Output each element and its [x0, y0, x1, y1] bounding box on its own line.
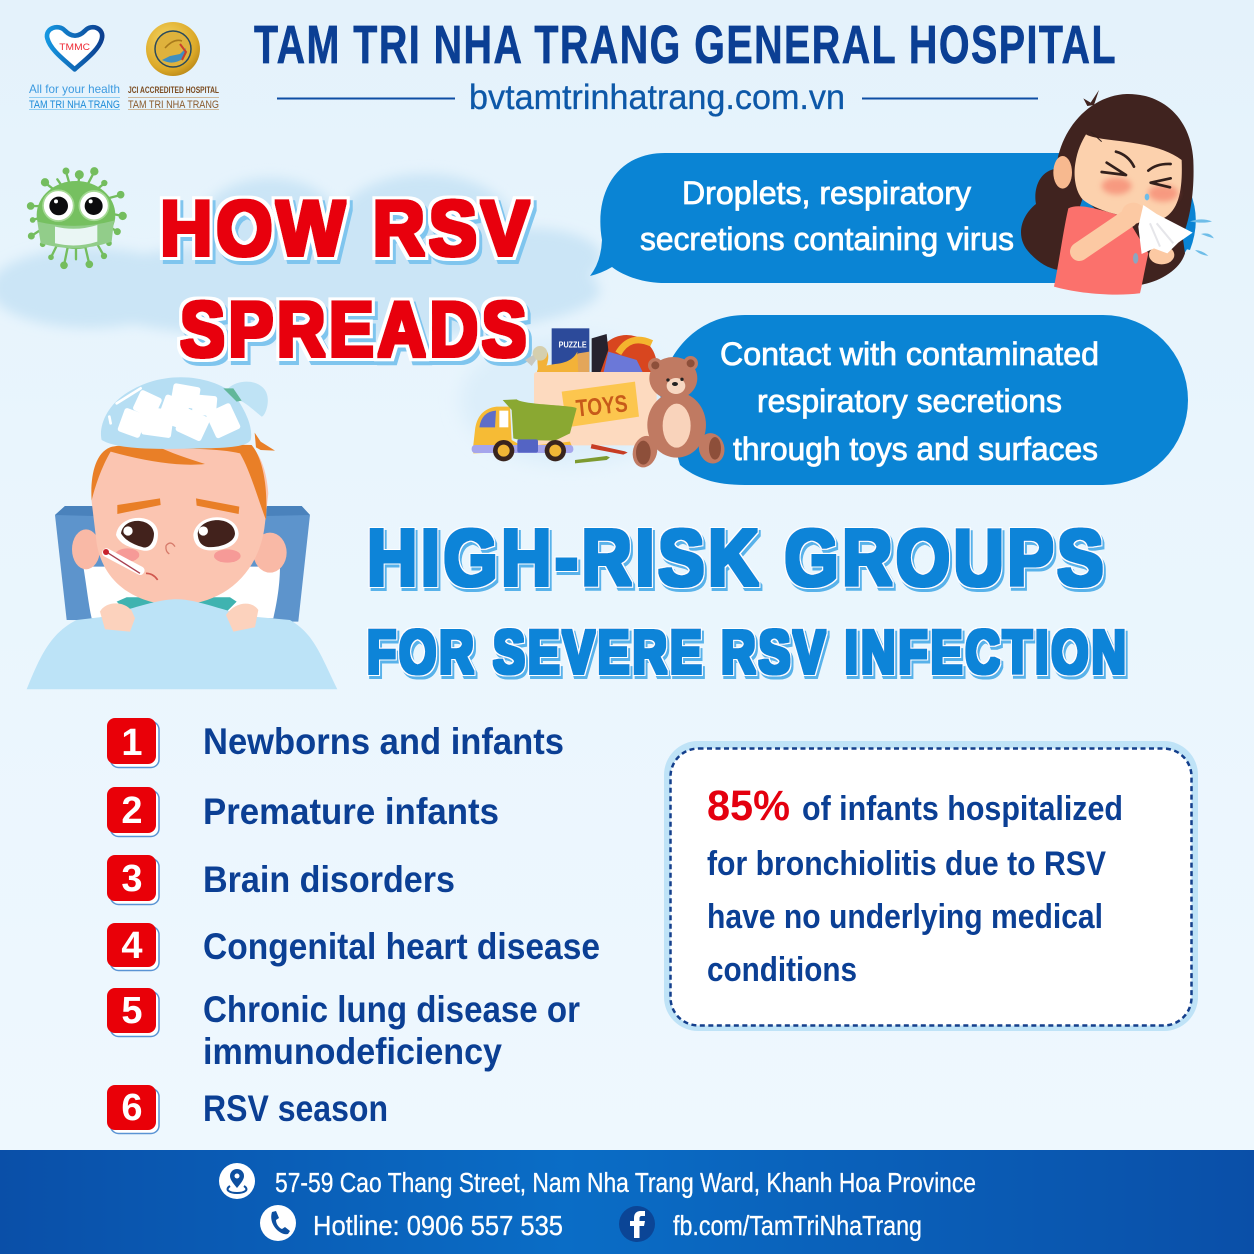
item 1: Newborns and infants: [203, 721, 564, 762]
heading: How RSV Spreads: [160, 184, 533, 373]
logo: JCI medal: TAM TRI NHA TRANG: [128, 99, 219, 111]
cloud behind toys: [460, 335, 680, 465]
logo: TMMC heart: All for your health: [29, 82, 120, 96]
callout: 85% statistic: of infants hospitalized: [802, 790, 1123, 828]
item 2: Premature infants: [203, 791, 499, 832]
callout: 85% statistic: have no underlying medical: [707, 898, 1103, 936]
item 3: Brain disorders: [203, 859, 455, 900]
logo: JCI medal: JCI ACCREDITED HOSPITAL: [128, 85, 219, 95]
illustration: toy box with truck and teddy bear: TOYS: [575, 390, 629, 423]
facebook address: fb.com/TamTriNhaTrang: [673, 1210, 922, 1241]
hotline: Hotline: 0906 557 535: [313, 1210, 563, 1241]
heading: How RSV Spreads: SPREADS: [180, 285, 530, 373]
item 2: [107, 787, 499, 836]
speech bubble: contact: through toys and surfaces: [733, 431, 1098, 467]
speech bubble: droplets: Droplets, respiratory: [682, 175, 971, 211]
cloud behind heading: [0, 174, 602, 340]
item 1: [107, 718, 564, 768]
icon: phone: [260, 1205, 296, 1241]
item 5: 5: [121, 990, 143, 1032]
speech bubble: contact: respiratory secretions: [757, 383, 1062, 419]
logo: TMMC heart: TAM TRI NHA TRANG: [29, 99, 120, 111]
item 4: 4: [121, 925, 143, 967]
speech bubble: droplets: [590, 153, 1195, 283]
callout: 85% statistic: 85%: [707, 782, 790, 830]
item 6: 6: [121, 1087, 143, 1129]
heading: High-risk groups: HIGH-RISK GROUPS: [367, 513, 1107, 602]
item 4: Congenital heart disease: [203, 926, 600, 967]
item 5: immunodeficiency: [203, 1031, 502, 1072]
website url: bvtamtrinhatrang.com.vn: [469, 78, 845, 117]
item 1: 1: [121, 722, 143, 764]
item 5: [107, 988, 580, 1072]
illustration: girl sneezing: [1021, 90, 1214, 295]
callout: 85% statistic: [664, 741, 1198, 1031]
footer: [0, 1150, 1254, 1254]
item 3: 3: [121, 858, 143, 900]
speech bubble: droplets: secretions containing virus: [640, 221, 1014, 257]
illustration: sick boy in bed: [27, 377, 337, 689]
illustration: toy box with truck and teddy bear: [472, 328, 728, 470]
speech bubble: contact: Contact with contaminated: [720, 336, 1099, 372]
list: high-risk groups: [107, 718, 600, 1134]
icon: virus mascot: [28, 168, 126, 268]
heading: High-risk groups: [367, 513, 1129, 686]
address: 57-59 Cao Thang Street, Nam Nha Trang Ward, Khanh Hoa Province: [275, 1167, 976, 1198]
logo: TMMC heart: TMMC: [59, 42, 91, 52]
item 4: [107, 923, 600, 970]
item 2: 2: [121, 790, 143, 832]
illustration: toy box with truck and teddy bear: PUZZLE: [559, 341, 587, 350]
item 6: [107, 1085, 388, 1134]
callout: 85% statistic: conditions: [707, 951, 857, 989]
callout: 85% statistic: for bronchiolitis due to RSV: [707, 845, 1106, 883]
icon: facebook: [619, 1206, 655, 1242]
icon: location: [219, 1163, 255, 1199]
item 3: [107, 855, 455, 904]
logo: JCI medal: [128, 22, 219, 111]
speech bubble: contact: [660, 315, 1188, 485]
item 5: Chronic lung disease or: [203, 989, 580, 1030]
heading: How RSV Spreads: HOW RSV: [160, 184, 533, 272]
logo: TMMC heart: [29, 27, 120, 111]
item 6: RSV season: [203, 1088, 388, 1129]
